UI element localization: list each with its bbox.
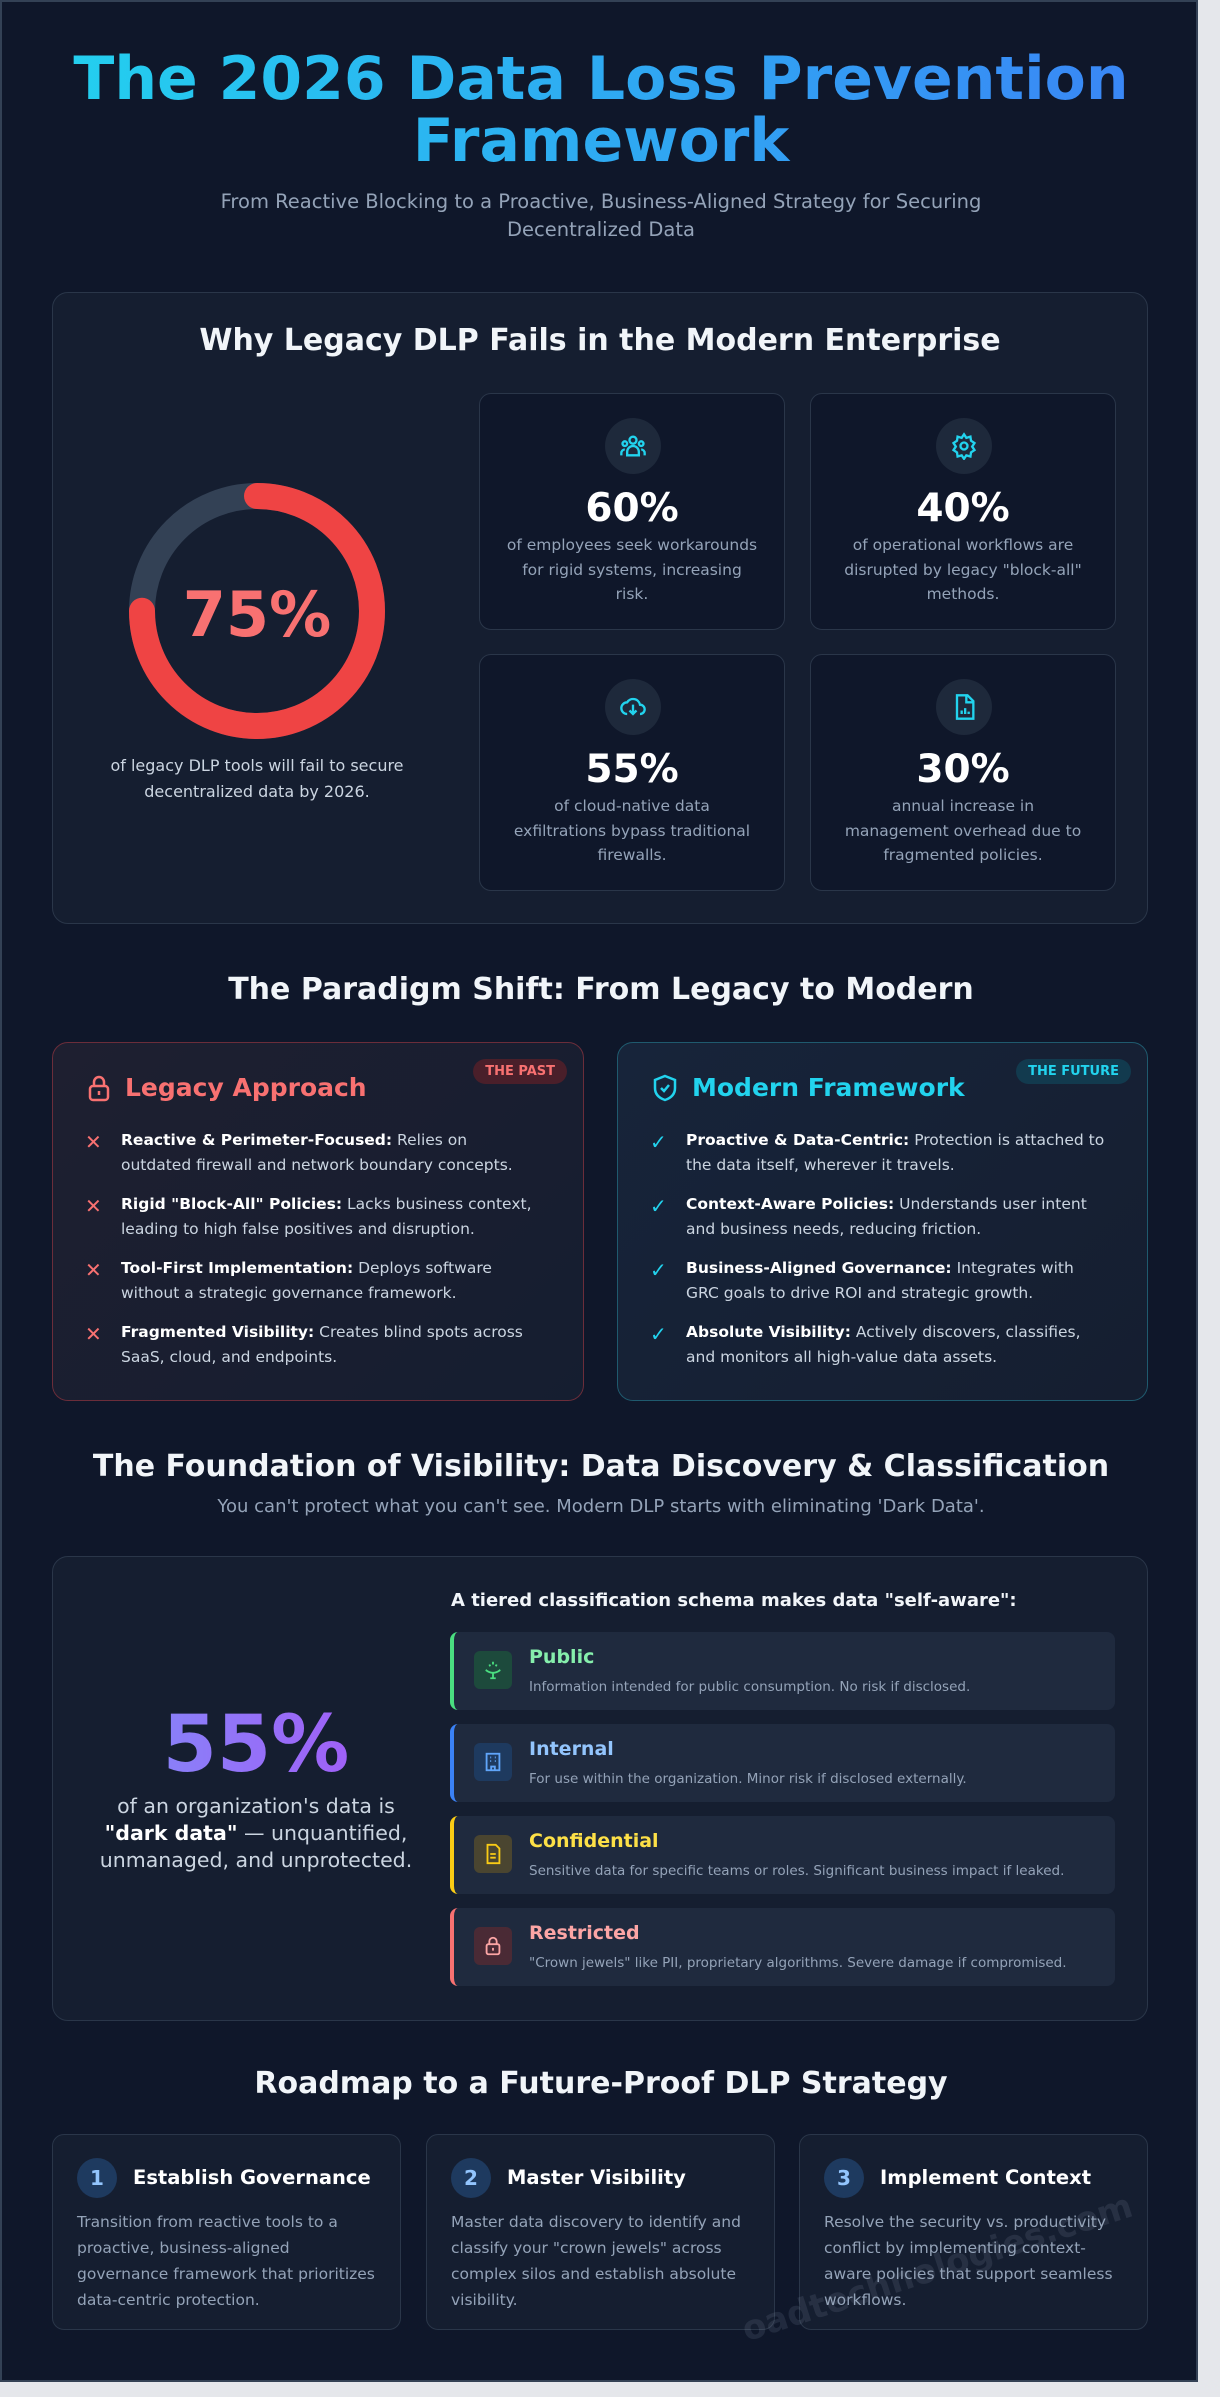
item list: Fragmented Visibility: Creates blind spots across SaaS, cloud, and endpoints. [121,1323,523,1366]
item list [650,1130,1104,1366]
roadmap step 1: 1 [90,2166,104,2190]
donut chart 75%: 75% [183,578,331,651]
tier: restricted: "Crown jewels" like PII, proprietary algorithms. Severe damage if compromised. [529,1955,1067,1971]
stat card 40% [810,393,1116,630]
icon: cloud download [605,679,661,735]
tier: restricted: Restricted [529,1922,640,1944]
roadmap step 3: 3 [837,2166,851,2190]
item list: ✓ [650,1194,667,1218]
roadmap step 3: Implement Context [880,2166,1091,2189]
header: modern framework: Modern Framework [692,1073,965,1102]
section heading: roadmap: Roadmap to a Future-Proof DLP Strategy [254,2066,948,2101]
item list: ✕ [85,1258,102,1282]
roadmap step 2: Master data discovery to identify and classify your "crown jewels" across complex silos and establish absolute visibility. [451,2213,741,2309]
tier: confidential [450,1816,1115,1894]
stat card 60% [479,393,785,630]
tier: public: Information intended for public consumption. No risk if disclosed. [529,1679,970,1695]
panel: why legacy DLP fails [52,292,1148,924]
stat card 55% [479,654,785,891]
tier: confidential: Sensitive data for specific teams or roles. Significant business impact if leaked. [529,1863,1064,1879]
item list: ✓ [650,1322,667,1346]
stat card 60%: 60% [585,486,679,531]
roadmap step 2: 2 [464,2166,478,2190]
item list [85,1130,532,1366]
watermark: oadtechnologies.com [737,2186,1137,2350]
item list: Business-Aligned Governance: Integrates with GRC goals to drive ROI and strategic growth. [686,1259,1074,1302]
panel: modern framework [617,1042,1148,1401]
item list: ✕ [85,1194,102,1218]
item list: Proactive & Data-Centric: Protection is attached to the data itself, wherever it travels. [686,1131,1104,1174]
stat card 60%: of employees seek workarounds for rigid systems, increasing risk. [507,536,757,603]
badge: the past [473,1059,567,1084]
tier: internal: For use within the organization. Minor risk if disclosed externally. [529,1771,967,1787]
item list: Absolute Visibility: Actively discovers, classifies, and monitors all high-value data assets. [686,1323,1081,1366]
roadmap step 3: Resolve the security vs. productivity conflict by implementing context-aware policies that support seamless workflows. [824,2213,1113,2309]
stat card 30%: management overhead due to fragmented policies. [845,822,1081,864]
donut caption: of legacy DLP tools will fail to secure decentralized data by 2026. [110,756,404,801]
roadmap step 1: Transition from reactive tools to a proactive, business-aligned [77,2213,338,2257]
big stat 55% dark data [100,1700,412,1872]
tier: internal: Internal [529,1738,614,1760]
roadmap step 1: Establish Governance [133,2166,371,2189]
title [2,48,1200,172]
section heading: foundation of visibility: The Foundation of Visibility: Data Discovery & Classification [93,1449,1109,1484]
tier: confidential: Confidential [529,1830,659,1852]
item list: outdated firewall and network boundary concepts. [121,1156,513,1174]
icon: gear [936,418,992,474]
header: legacy approach: Legacy Approach [125,1073,367,1102]
item list: Context-Aware Policies: Understands user intent and business needs, reducing friction. [686,1195,1087,1238]
item list: ✓ [650,1130,667,1154]
item list: Tool-First Implementation: Deploys software without a strategic governance framework. [121,1259,492,1302]
classification heading: A tiered classification schema makes data "self-aware": [451,1590,1017,1611]
stat card 55%: 55% [585,747,679,792]
tier: restricted [450,1908,1115,1986]
roadmap step 1 [52,2134,401,2330]
stat card 55%: of cloud-native data exfiltrations bypass traditional firewalls. [514,797,750,864]
tier: internal [450,1724,1115,1802]
tier: public [450,1632,1115,1710]
title: The 2026 Data Loss Prevention [73,44,1129,114]
roadmap step 2 [426,2134,775,2330]
roadmap step 1: governance framework that prioritizes data-centric protection. [77,2265,375,2309]
badge: the past: THE PAST [485,1064,555,1079]
item list: Rigid "Block-All" Policies: Lacks business context, leading to high false positives and disruption. [121,1195,532,1238]
donut chart 75% [129,483,385,739]
item list: ✕ [85,1130,102,1154]
icon: users [605,418,661,474]
badge: the future: THE FUTURE [1028,1064,1119,1079]
subtitle: From Reactive Blocking to a Proactive, Business-Aligned Strategy for Securing Decentralized Data [221,190,981,241]
stat card 30% [810,654,1116,891]
stat card 30%: annual increase in [892,797,1034,815]
big stat 55% dark data: of an organization's data is "dark data" — unquantified, unmanaged, and unprotected. [100,1794,412,1872]
tier: public: Public [529,1646,594,1668]
item list: Reactive & Perimeter-Focused: Relies on [121,1131,467,1149]
panel: dark data and classification [52,1556,1148,2021]
section subtitle: You can't protect what you can't see. Modern DLP starts with eliminating 'Dark Data'. [217,1496,985,1517]
badge: the future [1016,1059,1131,1084]
section heading: paradigm shift: The Paradigm Shift: From Legacy to Modern [228,972,974,1007]
icon: file chart [936,679,992,735]
big stat 55% dark data: 55% [163,1700,349,1790]
panel: legacy approach [52,1042,584,1401]
stat card 30%: 30% [916,747,1010,792]
title: Framework [413,106,789,176]
stat card 40%: of operational workflows are disrupted by legacy "block-all" methods. [844,536,1082,603]
heading: Why Legacy DLP Fails in the Modern Enterprise [199,323,1001,358]
item list: ✕ [85,1322,102,1346]
roadmap step 3 [799,2134,1148,2330]
stat card 40%: 40% [916,486,1010,531]
item list: ✓ [650,1258,667,1282]
roadmap step 2: Master Visibility [507,2166,686,2189]
